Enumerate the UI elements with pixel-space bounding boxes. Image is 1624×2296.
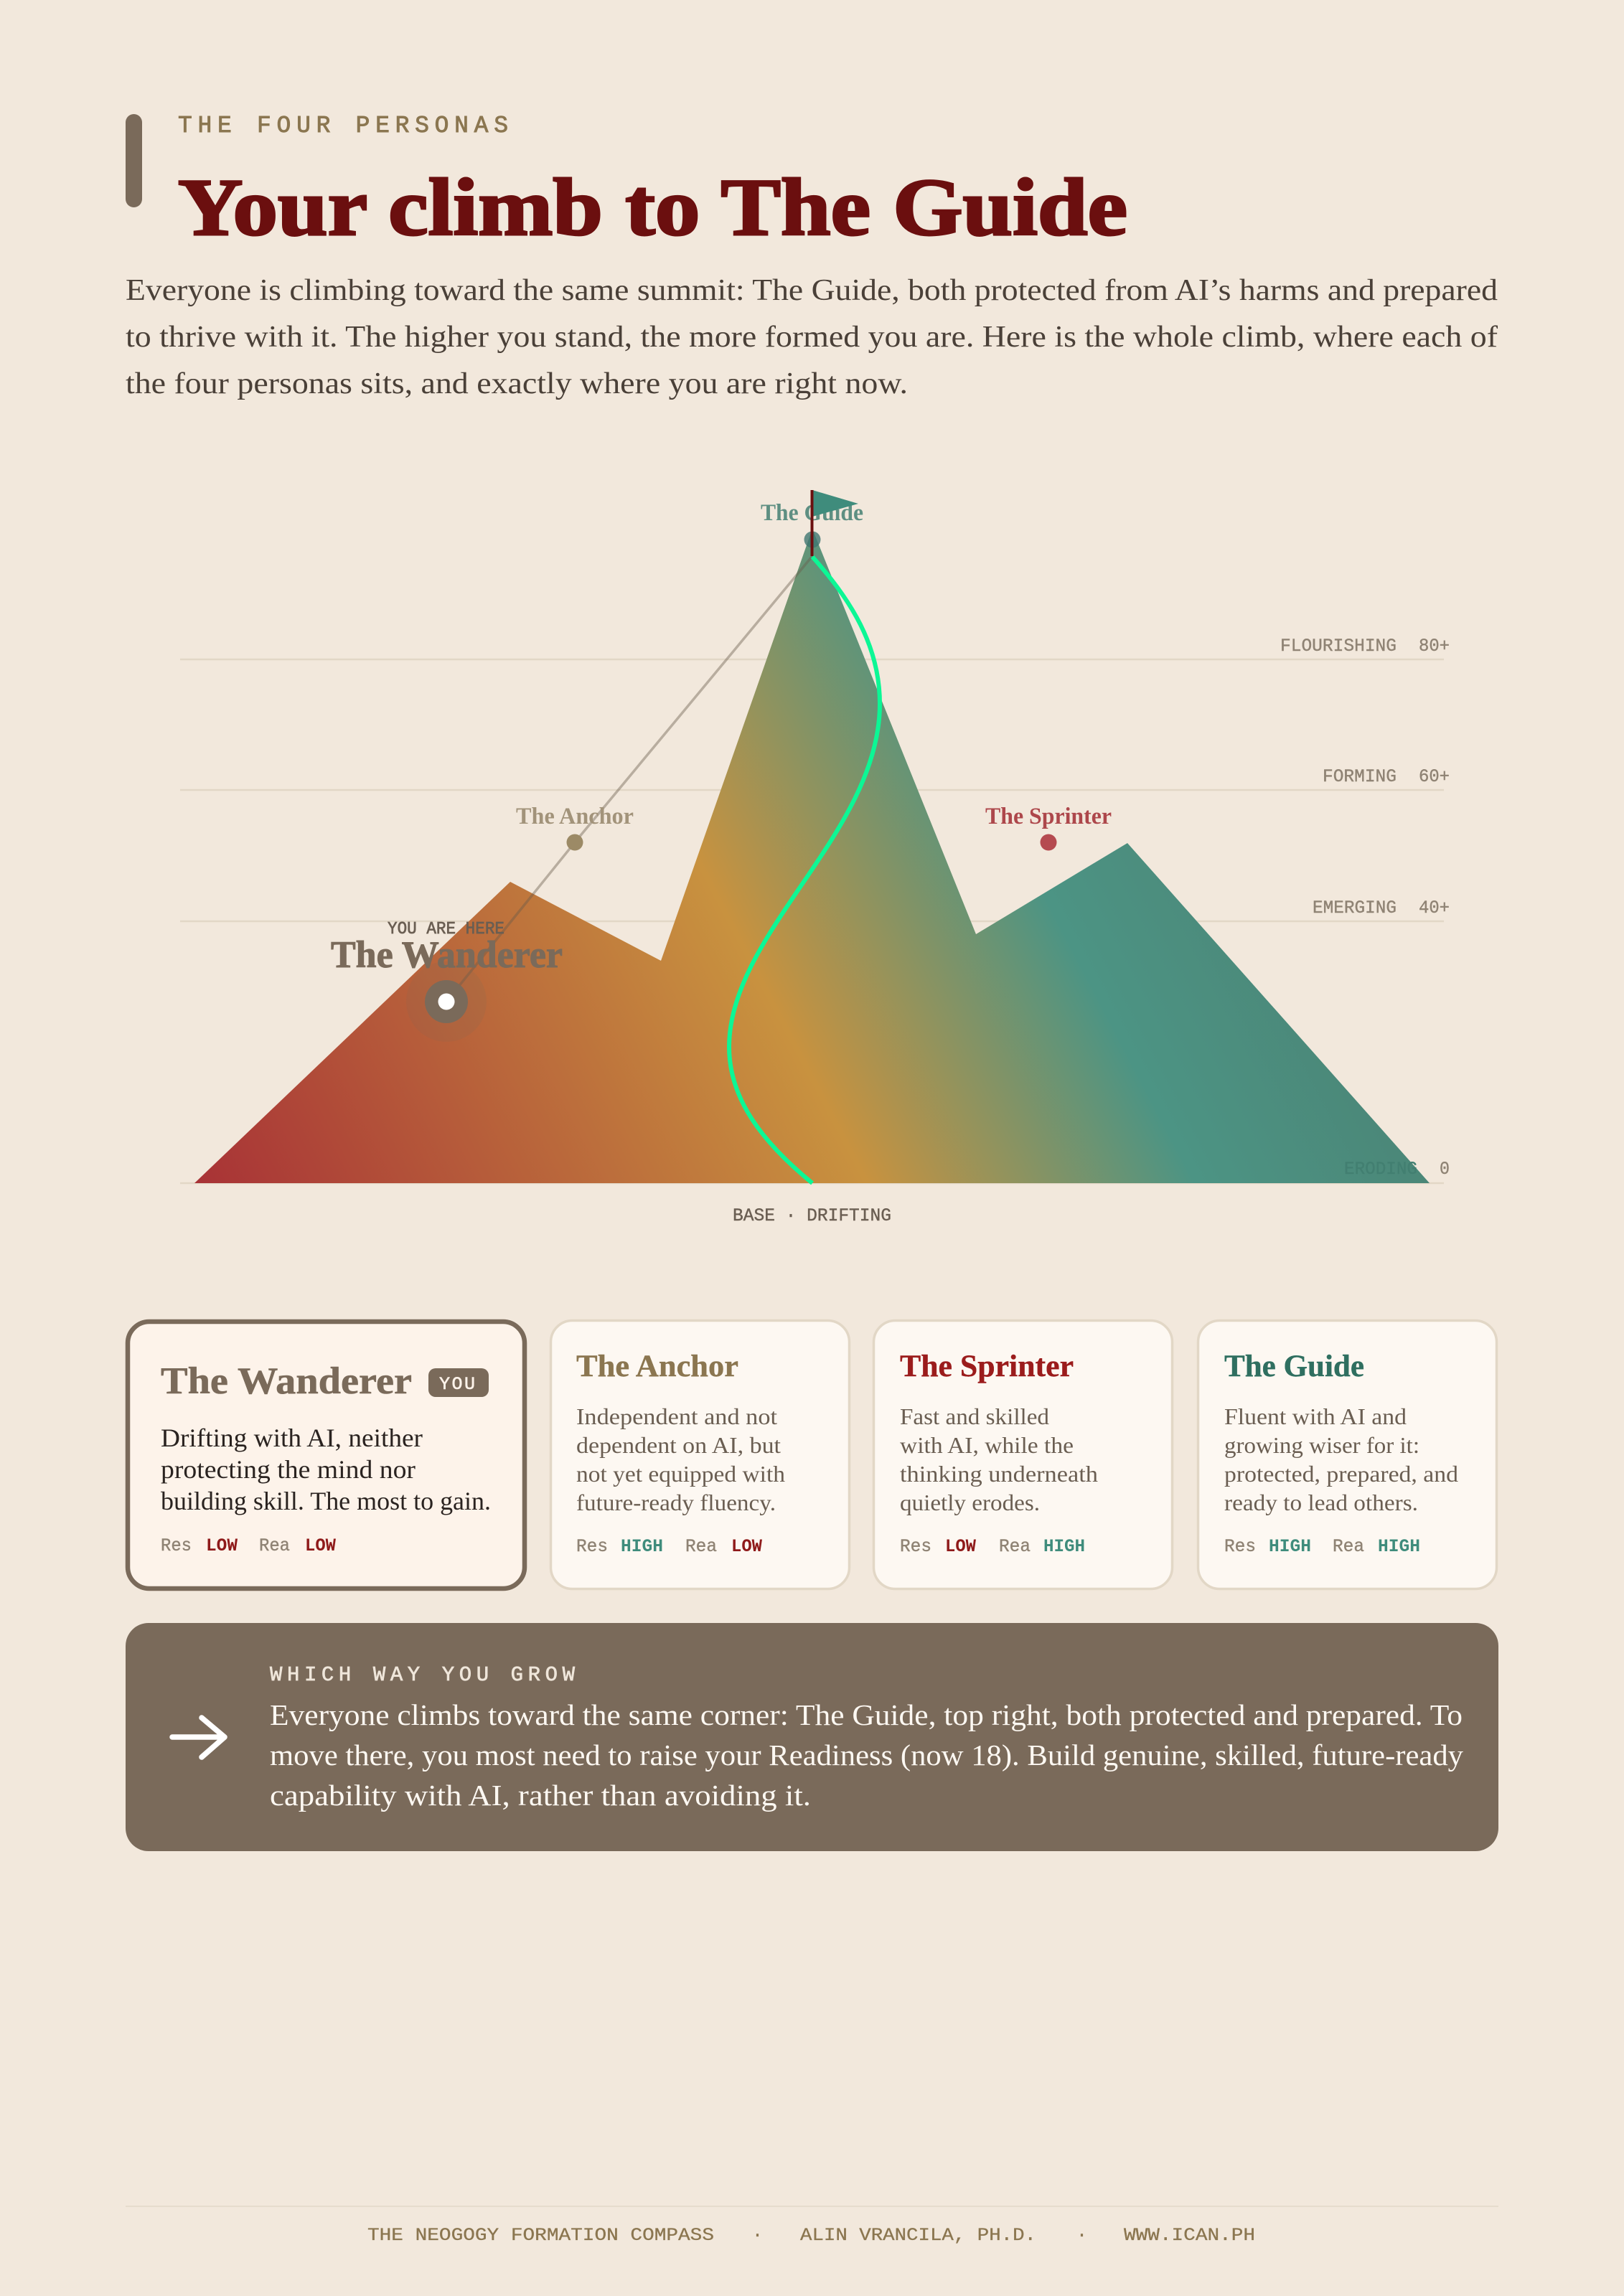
marker: the sprinter: The Sprinter bbox=[985, 804, 1112, 829]
card: the guide bbox=[1198, 1320, 1497, 1589]
card: the wanderer: protecting the mind nor bbox=[161, 1455, 416, 1484]
marker: the sprinter bbox=[985, 804, 1112, 851]
footer: · bbox=[752, 2225, 763, 2246]
card: the sprinter: Fast and skilled bbox=[900, 1403, 1049, 1429]
callout text: move there, you most need to raise your Readiness (now 18). Build genuine, skilled, future-ready bbox=[270, 1739, 1464, 1772]
footer: THE NEOGOGY FORMATION COMPASS bbox=[367, 2225, 714, 2246]
card: the guide: growing wiser for it: bbox=[1224, 1432, 1419, 1458]
card: the anchor: LOW bbox=[731, 1536, 762, 1557]
level labels: FLOURISHING bbox=[1280, 636, 1397, 657]
intro text: the four personas sits, and exactly where you are right now. bbox=[126, 367, 908, 400]
level labels: 40+ bbox=[1419, 898, 1450, 918]
growth path bbox=[729, 557, 880, 1183]
marker: the wanderer: The Wanderer bbox=[331, 934, 563, 976]
card: the anchor: Res bbox=[576, 1536, 608, 1557]
eroding label: ERODING bbox=[1344, 1159, 1417, 1180]
mountain chart bbox=[180, 490, 1450, 1226]
marker: the wanderer bbox=[331, 920, 563, 1042]
card: the sprinter: The Sprinter bbox=[900, 1350, 1074, 1383]
footer: ALIN VRANCILA, PH.D. bbox=[800, 2225, 1036, 2246]
card: the sprinter bbox=[874, 1320, 1173, 1589]
card: the guide: Res bbox=[1224, 1536, 1256, 1557]
card: the wanderer: building skill. The most to gain. bbox=[161, 1487, 491, 1515]
base label: BASE · DRIFTING bbox=[733, 1205, 891, 1226]
header bbox=[126, 113, 1498, 400]
footer: WWW.ICAN.PH bbox=[1124, 2225, 1255, 2246]
card: the wanderer: Drifting with AI, neither bbox=[161, 1424, 423, 1452]
climb line bbox=[446, 556, 812, 1002]
level labels bbox=[1280, 636, 1450, 1180]
callout label: WHICH WAY YOU GROW bbox=[270, 1663, 576, 1687]
eyebrow: THE FOUR PERSONAS bbox=[178, 113, 508, 139]
mountain range bbox=[194, 529, 1430, 1183]
title: Your climb to The Guide bbox=[178, 163, 1127, 253]
marker: the anchor bbox=[516, 804, 634, 851]
level labels: FORMING bbox=[1323, 766, 1397, 787]
card: the wanderer: LOW bbox=[206, 1535, 238, 1556]
level labels: 0 bbox=[1440, 1159, 1450, 1180]
flag bbox=[811, 490, 858, 556]
level labels: 80+ bbox=[1419, 636, 1450, 657]
icon: arrow bbox=[172, 1718, 225, 1757]
marker: the guide: The Guide bbox=[761, 500, 863, 526]
card: the sprinter: quietly erodes. bbox=[900, 1490, 1040, 1515]
intro text: to thrive with it. The higher you stand, the more formed you are. Here is the whole climb, where each of bbox=[126, 321, 1498, 354]
intro text bbox=[126, 274, 1498, 400]
card: the guide: HIGH bbox=[1378, 1536, 1420, 1557]
callout text: capability with AI, rather than avoiding it. bbox=[270, 1779, 811, 1812]
level labels: 60+ bbox=[1419, 766, 1450, 787]
card: the guide: Rea bbox=[1333, 1536, 1364, 1557]
card: the wanderer: Res bbox=[161, 1535, 192, 1556]
accent bar bbox=[126, 114, 142, 207]
marker: the guide bbox=[761, 500, 863, 548]
card: the wanderer: The Wanderer bbox=[161, 1360, 412, 1402]
card: the wanderer: LOW bbox=[305, 1535, 336, 1556]
card: the anchor bbox=[551, 1320, 850, 1589]
card: the anchor: not yet equipped with bbox=[576, 1461, 785, 1487]
footer: · bbox=[1076, 2225, 1087, 2246]
card: the guide: Fluent with AI and bbox=[1224, 1403, 1407, 1429]
you badge bbox=[428, 1368, 489, 1397]
card: the anchor: Independent and not bbox=[576, 1403, 777, 1429]
marker: the wanderer: YOU ARE HERE bbox=[388, 920, 504, 939]
level labels: EMERGING bbox=[1313, 898, 1397, 918]
card: the anchor: future-ready fluency. bbox=[576, 1490, 776, 1515]
card: the sprinter: LOW bbox=[945, 1536, 976, 1557]
card: the wanderer bbox=[128, 1322, 525, 1589]
callout text: Everyone climbs toward the same corner: The Guide, top right, both protected and prepared. To bbox=[270, 1698, 1463, 1731]
card: the anchor: HIGH bbox=[621, 1536, 663, 1557]
card: the guide: ready to lead others. bbox=[1224, 1490, 1418, 1515]
callout text bbox=[270, 1698, 1464, 1812]
card: the sprinter: HIGH bbox=[1043, 1536, 1085, 1557]
you badge: YOU bbox=[439, 1374, 475, 1395]
callout: which way you grow bbox=[126, 1623, 1498, 1851]
marker: the anchor: The Anchor bbox=[516, 804, 634, 829]
footer bbox=[126, 2206, 1498, 2246]
card: the sprinter: thinking underneath bbox=[900, 1461, 1098, 1487]
card: the anchor: The Anchor bbox=[576, 1350, 738, 1383]
card: the sprinter: with AI, while the bbox=[900, 1432, 1074, 1458]
card: the guide: HIGH bbox=[1269, 1536, 1311, 1557]
intro text: Everyone is climbing toward the same summit: The Guide, both protected from AI’s harms and prepared bbox=[126, 274, 1498, 307]
card: the guide: protected, prepared, and bbox=[1224, 1461, 1458, 1487]
card: the sprinter: Res bbox=[900, 1536, 931, 1557]
card: the sprinter: Rea bbox=[999, 1536, 1031, 1557]
card: the anchor: Rea bbox=[685, 1536, 717, 1557]
card: the guide: The Guide bbox=[1224, 1350, 1364, 1383]
card: the wanderer: Rea bbox=[259, 1535, 290, 1556]
card: the anchor: dependent on AI, but bbox=[576, 1432, 781, 1458]
